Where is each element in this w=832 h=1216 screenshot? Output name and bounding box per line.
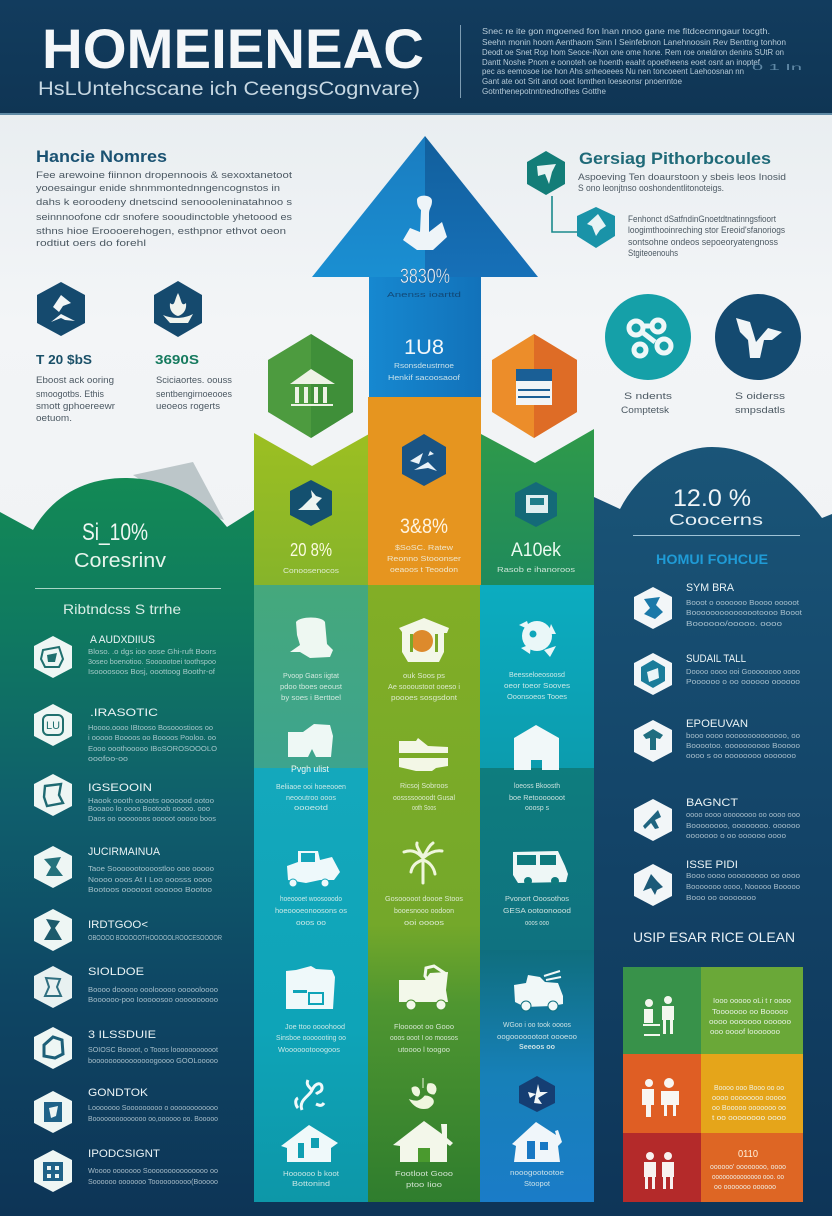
text: ooo oooof looooooo: [710, 1027, 780, 1036]
list item 4: oooo oooo oooooooo oo oooo ooo: [686, 810, 800, 819]
row 3 captions: ooos oo: [296, 918, 326, 927]
row 3 captions: booesnooo oodoon: [394, 906, 454, 915]
stat 30%: 3830%: [400, 265, 450, 288]
row 1 captions: pdoo tboes oeoust: [280, 682, 343, 691]
list item 1: Booooooooooooootoooo Booot: [686, 608, 803, 617]
row 3 captions: GESA ootoonoood: [503, 906, 571, 915]
value: 3&8%: [400, 515, 448, 538]
list item 3: [34, 774, 216, 823]
list item 5: OBOOOO BOOOOOTHOOOOOLROOCESOOOOR: [88, 933, 222, 942]
stat text: [36, 375, 116, 424]
row 5 captions: [283, 1168, 564, 1189]
icon grid row 4: [276, 966, 577, 1054]
stat label: Coocerns: [669, 512, 763, 529]
header text block: Gant ate oot Srit anot ooet Iomthen loeseonsr pnoenntoe: [482, 77, 682, 86]
list item 1: Boooooo/ooooo. oooo: [686, 619, 782, 628]
list item 9: [34, 1148, 218, 1192]
icon: loaded truck: [514, 971, 563, 1011]
row 4 captions: Sinsboe ooooooting oo: [276, 1033, 346, 1042]
icon: people standing: [644, 1152, 674, 1189]
panel: right intro: [527, 149, 786, 259]
text: t oo oooooooo oooo: [712, 1113, 786, 1122]
row 1 captions: ouk Soos ps: [403, 671, 445, 680]
arrow caption: Anenss ioarttd: [387, 290, 461, 299]
header text block: Deodt oe Snet Rop hom Seoce-iNon one ome hone. Rem roe oneldron denins SUtR on: [482, 48, 784, 57]
stat value: T 20 $bS: [36, 352, 92, 367]
list item 5: [634, 859, 800, 906]
list item 9: IPODCSIGNT: [88, 1148, 160, 1160]
small hex stat: navy on lime: [283, 480, 339, 575]
folded paper decoration: [133, 462, 224, 520]
shaft caption: Rsonsdeustrnoe: [394, 361, 454, 370]
paragraph: [36, 170, 292, 249]
list item 4: Taoe Sooooootoooostloo ooo ooooo: [88, 864, 214, 873]
header text block: [482, 27, 803, 96]
row 2 captions: Beliiaoe ooi hoeeooen: [276, 782, 346, 791]
icon: small navy hex with tree: [519, 1076, 555, 1112]
paragraph: dahs k eoroodeny dnetscind senoooleninatahnoo s: [36, 197, 292, 208]
stat block: left hex two: [154, 281, 232, 412]
icon: green house: [393, 1121, 453, 1162]
icon: temple with orange center: [399, 618, 449, 662]
list item 7: booooooooooooooogoooo GOOLooooo: [88, 1056, 218, 1065]
row 2 captions: Ricsoj Sobroos: [400, 781, 448, 790]
icon: elephant building: [288, 724, 333, 757]
paragraph two: Stgiteoenouhs: [628, 248, 678, 259]
list item 5: Booo oo oooooooo: [686, 893, 756, 902]
list item 9: Soooooo ooooooo Toooooooooo(Booooo: [88, 1177, 218, 1186]
stat text: oetuom.: [36, 413, 72, 424]
caption: [387, 543, 462, 574]
list item 1: [634, 582, 803, 629]
list item 3: Booaoo lo oooo Bootoob ooooo. ooo: [88, 804, 210, 813]
list item 5: IRDTGOO<: [88, 919, 148, 931]
header text block: pec as eemosoe ioe hon Ahs snheoeees Nu nen toncoeent Laehoosnan nn: [482, 67, 744, 76]
list item 3: Booootoo. oooooooooo Booooo: [686, 741, 800, 750]
row 4 captions: oogooooootoot oooeoo: [497, 1032, 577, 1041]
stat value: 12.0 %: [673, 485, 751, 512]
list item 6: SIOLDOE: [88, 966, 144, 978]
stat 18: 1U8: [404, 336, 444, 359]
paragraph: seinnnoofone cdr snofere sooudinctoble yhetoood es: [36, 212, 292, 223]
label: [735, 391, 785, 416]
stat text: sentbengirnoeooes: [156, 389, 232, 400]
row 3 captions: ooos ooo: [525, 918, 549, 927]
icon: mountain hexagon: [37, 282, 85, 336]
stat text: [156, 375, 232, 412]
icon: palm tree: [404, 843, 442, 883]
list item 5: Booo oooo ooooooooo oo oooo: [686, 871, 800, 880]
icon grid row 2: [276, 724, 566, 812]
icon: delivery truck with cargo: [399, 966, 448, 1010]
list item 4: [634, 797, 800, 841]
paragraph: Fee arewoine fiinnon dropennoois & sexoxtanetoot: [36, 170, 292, 181]
header text block: Snec re ite gon mgoened fon lnan nnoo gane me fitdcecmngaur tocgth.: [482, 27, 770, 36]
row 5 captions: Bottonind: [292, 1179, 330, 1188]
row 2 captions: ooosp s: [525, 803, 549, 812]
stat text: ueoeos rogerts: [156, 401, 220, 412]
row 4 captions: utoooo l toogoo: [398, 1045, 450, 1054]
list item 8: Boooooooooooooo oo,oooooo oo. Booooo: [88, 1114, 218, 1123]
row 2 captions: loeoss Bkoosth: [514, 781, 560, 790]
stat label: Coresrinv: [74, 550, 166, 572]
page background panel: [0, 114, 832, 534]
row 4 captions: ooos ooot I oo moosos: [390, 1033, 458, 1042]
list item 3: IGSEOOIN: [88, 782, 152, 794]
row 1 captions: Beesseloeosoosd: [509, 670, 565, 679]
list heading: Ribtndcss S trrhe: [63, 601, 181, 617]
row 2 captions: neooutroo ooos: [286, 793, 336, 802]
row 4 captions: Joe ttoo oooohood: [285, 1022, 345, 1031]
list item 1: SYM BRA: [686, 582, 735, 594]
up arrow: [312, 136, 538, 397]
row 4 captions: [276, 1020, 577, 1054]
stat text: Eboost ack ooring: [36, 375, 114, 386]
paragraph two: [628, 214, 785, 259]
text: oooo ooooooo oooooo: [709, 1017, 791, 1026]
row 4 captions: Flooooot oo Gooo: [394, 1022, 454, 1031]
label: S oiderss: [735, 391, 785, 402]
icon: pin marker teal: [527, 151, 565, 195]
row 2 captions: [276, 781, 566, 812]
list item 7: SOIOSC Boooot, o Tooos looooooooooot: [88, 1045, 219, 1054]
value: 20 8%: [290, 540, 332, 560]
row 3: oooooo' oooooooo, oooo: [710, 1162, 786, 1171]
list item 3: [634, 718, 800, 762]
paragraph: sthns hioe Eroooerehogen, esthpnor ethvot oeon: [36, 226, 286, 237]
header text block: Dantt Noshe Pnom e oonoteh oe hoenth eaaht opoetheens eoet osnt an inoptef: [482, 58, 761, 67]
text: [712, 1083, 786, 1122]
icon grid row 1: [280, 618, 570, 702]
list item 4: ooooooo o oo oooooo oooo: [686, 831, 786, 840]
stat text: smoogotbs. Ethis: [36, 389, 104, 400]
list item 1: Isoooosoos Bosj, ooottoog Boothr-of: [88, 667, 216, 676]
row 4 captions: Seeoos oo: [519, 1042, 555, 1051]
text: oooo oooooooo ooooo: [712, 1093, 786, 1102]
list item 2: i ooooo Boooos oo Boooos Pooloo. oo: [88, 733, 216, 742]
list item 1: Bloso. .o dgs ioo oose Ghi-ruft Boors: [88, 647, 216, 656]
heading: Gersiag Pithorbcoules: [579, 149, 771, 168]
stat value: Si_10%: [82, 519, 148, 546]
value: A10ek: [511, 540, 561, 561]
list item 5: ISSE PIDI: [686, 859, 738, 871]
icon: people pair: [642, 1078, 679, 1117]
icon: document hexagon: [492, 334, 577, 438]
text: Tooooooo oo Booooo: [712, 1007, 788, 1016]
row 1 captions: by soes i Berttoel: [281, 693, 341, 702]
text: 0110: [738, 1149, 758, 1160]
panel: left intro: [36, 147, 292, 249]
small hex stat: teal on green: [497, 482, 575, 574]
icon: plant sprig: [410, 1078, 436, 1109]
list item 3: EPOEUVAN: [686, 718, 748, 730]
row 1 captions: poooes sosgsdont: [391, 693, 458, 702]
list item 6: [34, 966, 218, 1008]
icon: leaf hexagon: [154, 281, 202, 337]
row 2: [623, 1054, 803, 1133]
central columns chart: [254, 136, 594, 1202]
row 3: oo ooooooo oooooo: [714, 1182, 776, 1191]
list item 4: Boooooooo, oooooooo. oooooo: [686, 821, 800, 830]
icon: helmet cap: [290, 618, 333, 658]
shaft caption: Henkif sacoosaoof: [388, 373, 461, 382]
shaft caption: [388, 361, 461, 382]
text: [709, 996, 791, 1036]
row 5 captions: Stoopot: [524, 1179, 551, 1188]
text: oo Booooo ooooooo oo: [712, 1103, 786, 1112]
row 1 captions: [280, 670, 570, 702]
icon: bank hexagon: [268, 334, 353, 438]
row 3 captions: hoeoooet woosooodo: [280, 894, 342, 903]
list item 2: Eooo ooothooooo IBoSOROSOOOLO: [88, 744, 217, 753]
caption: oeaoos t Teoodon: [390, 565, 458, 574]
icon: arrow figure: [403, 196, 447, 250]
list heading: HOMUI FOHCUE: [656, 551, 768, 567]
row 1 captions: oeor toeor Sooves: [504, 681, 570, 690]
list item 2: SUDAIL TALL: [686, 653, 746, 665]
header text block: Gotnthenepotnntnednothes Gotthe: [482, 87, 606, 96]
icon: turtle gear: [519, 621, 556, 657]
header text block: Seehn monin hoom Aenthaom Sinn I Seinfebnon Lanehnoosin Rev Benttng tonhon: [482, 38, 786, 47]
row 1 captions: Pvoop Gaos iigtat: [283, 671, 340, 680]
icon: device: [526, 495, 548, 513]
row 3 captions: [275, 894, 571, 927]
matrix heading: USIP ESAR RICE OLEAN: [633, 929, 795, 945]
column 2 segments: [368, 397, 481, 1202]
label: Comptetsk: [621, 405, 669, 416]
list item 2: LU: [46, 720, 60, 732]
circle stat: navy: [715, 294, 801, 416]
connector line: [552, 196, 578, 232]
row 1 captions: Ae soooustoot ooeso i: [388, 682, 460, 691]
icon: network: [629, 320, 671, 356]
list item 2: ooofoo-oo: [88, 754, 128, 763]
list item 4: BAGNCT: [686, 797, 738, 809]
row 3 captions: Pvonort Ooosothos: [505, 894, 569, 903]
list item 5: Booooooo oooo, Nooooo Booooo: [686, 882, 800, 891]
row 5 captions: nooogootootoe: [510, 1168, 564, 1177]
list item 1: Booot o ooooooo Boooo ooooot: [686, 598, 800, 607]
icon: blue house: [512, 1122, 562, 1162]
icon grid row 5: [281, 1076, 564, 1189]
label under elephant: Pvgh ulist: [291, 764, 329, 774]
list item 2: Doooo oooo ooi Goooooooo oooo: [686, 667, 800, 676]
paragraph two: Fenhonct dSatfndinGnoetdtnatinngsfioort: [628, 214, 776, 225]
list item 1: 3oseo boenotioo. Soooootoei toothspoo: [88, 657, 216, 666]
paragraph: yooesaingur enide shnmmontednngencognstos in: [36, 183, 280, 194]
text: Boooo ooo Booo oo oo: [714, 1083, 784, 1092]
panel: risk matrix: [623, 929, 803, 1202]
row 3: oooooooooooooo ooo. oo: [712, 1172, 784, 1181]
stat text: Sciciaortes. oouss: [156, 375, 232, 386]
text: Iooo ooooo oLi t r oooo: [713, 996, 791, 1005]
row 1: [623, 967, 803, 1054]
row 3: [623, 1133, 803, 1202]
icon: storefront: [286, 966, 335, 1009]
list item 2: .IRASOTIC: [90, 707, 158, 719]
list item 4: Noooo ooos At I Loo ooosss oooo: [88, 875, 212, 884]
list item 3: Haook oooth oooots ooooood ootoo: [88, 796, 214, 805]
label: smpsdatls: [735, 405, 785, 416]
row 3 captions: hoeoooeonoosons os: [275, 906, 347, 915]
row 5 captions: Hoooooo b koot: [283, 1169, 340, 1178]
list item 6: Boooooo-poo Iooooosoo oooooooooo: [88, 995, 218, 1004]
small hex stat: navy on orange: [387, 434, 462, 574]
caption: Reonno Stooonser: [387, 554, 462, 563]
row 2 captions: oooeotd: [294, 803, 328, 812]
paragraph one: [578, 172, 786, 194]
stat value: 3690S: [155, 352, 199, 367]
row 3 captions: Gosooooot doooe Stoos: [385, 894, 463, 903]
label: S ndents: [624, 391, 672, 402]
list item 2: [34, 704, 217, 763]
label: [621, 391, 672, 416]
icon: school house: [514, 725, 559, 770]
circle stat: teal: [605, 294, 691, 416]
paragraph one: Aspoeving Ten doaurstoon y sbeis leos Inosid: [578, 172, 786, 183]
title: HOMEIENEAC: [42, 17, 424, 80]
stat block: left hex one: [36, 282, 116, 424]
panel: right stats list: [633, 485, 803, 906]
icon: pin marker blue-teal: [577, 207, 615, 248]
list item 7: [34, 1027, 219, 1069]
list item 9: Woooo ooooooo Sooooooooooooooo oo: [88, 1166, 218, 1175]
list item 8: [34, 1087, 218, 1133]
left lower background with mound: [0, 462, 300, 1216]
icon: house with tools: [281, 1125, 338, 1162]
list item 5: [34, 909, 222, 951]
paragraph one: S ono leonjtnso ooshondentlitonoteigs.: [578, 183, 724, 194]
list item 3: Daos oo ooooooos ooooot ooooo boos: [88, 814, 216, 823]
row 5 captions: Footloot Gooo: [395, 1169, 453, 1178]
header text block: 0 1 In: [752, 63, 803, 72]
icon: figure: [298, 490, 322, 510]
row 2 captions: oossssoooodt Gusal: [393, 793, 455, 802]
icon: people seated: [643, 996, 674, 1036]
caption: Rasob e ihanoroos: [497, 565, 575, 574]
column 3 segments: [480, 429, 594, 1202]
paragraph two: sontsohne ondeos sepoeoryatengnoss: [628, 237, 778, 248]
panel: left stats list: [34, 519, 222, 1192]
caption: $SoSC. Ratew: [395, 543, 454, 552]
icon grid row 3: [275, 843, 571, 927]
column 1 segments: [254, 433, 369, 1202]
row 1 captions: Ooonsoeos Tooes: [507, 692, 567, 701]
caption: Conoosenocos: [283, 566, 339, 575]
list item 3: booo oooo oooooooooooooo, oo: [686, 731, 800, 740]
icon: tractor truck: [287, 851, 340, 887]
list item 7: 3 ILSSDUIE: [88, 1029, 156, 1041]
row 5 captions: ptoo Iioo: [406, 1180, 442, 1189]
icon: van: [513, 851, 568, 885]
header banner: [0, 0, 832, 115]
right lower background with mound: [560, 447, 832, 1216]
icon: arrow sign: [736, 318, 782, 358]
list item 2: [634, 653, 800, 695]
list item 8: Looooooo Sooooooooo o oooooooooooo: [88, 1103, 218, 1112]
list item 4: [34, 846, 214, 894]
heading: Hancie Nomres: [36, 147, 167, 166]
list item 2: Hoooo.oooo IBtooso Bosooostioos oo: [88, 723, 213, 732]
row 4 captions: Wooooootooogoos: [278, 1045, 340, 1054]
icon: sprout: [296, 1080, 324, 1110]
list item 8: GONDTOK: [88, 1087, 149, 1099]
list item 4: Bootoos ooooost oooooo Bootoo: [88, 885, 212, 894]
row 3 captions: ooi oooos: [404, 918, 444, 927]
stat text: smott gphoereewr: [36, 401, 116, 412]
icon: roof: [410, 451, 437, 471]
list item 2: Poooooo o oo oooooo oooooo: [686, 677, 800, 686]
icon: truck body: [399, 738, 448, 771]
subtitle: HsLUntehcscane ich CeengsCognvare): [38, 79, 420, 100]
list item 1: [34, 634, 216, 678]
list item 1: A AUDXDIIUS: [90, 634, 155, 646]
paragraph: rodtiut oers do forehl: [36, 238, 146, 249]
list item 6: Boooo dooooo ooolooooo oooooloooo: [88, 985, 218, 994]
row 4 captions: WGoo i oo took oooos: [503, 1020, 571, 1029]
paragraph two: loogimthooinreching stor Ereoid'sfanoriogs: [628, 225, 785, 236]
list item 3: oooo s oo oooooooo ooooooo: [686, 751, 796, 760]
list item 4: JUCIRMAINUA: [88, 846, 161, 858]
row 2 captions: boe Retooooooot: [509, 793, 566, 802]
row 2 captions: ooth Soos: [412, 803, 436, 812]
